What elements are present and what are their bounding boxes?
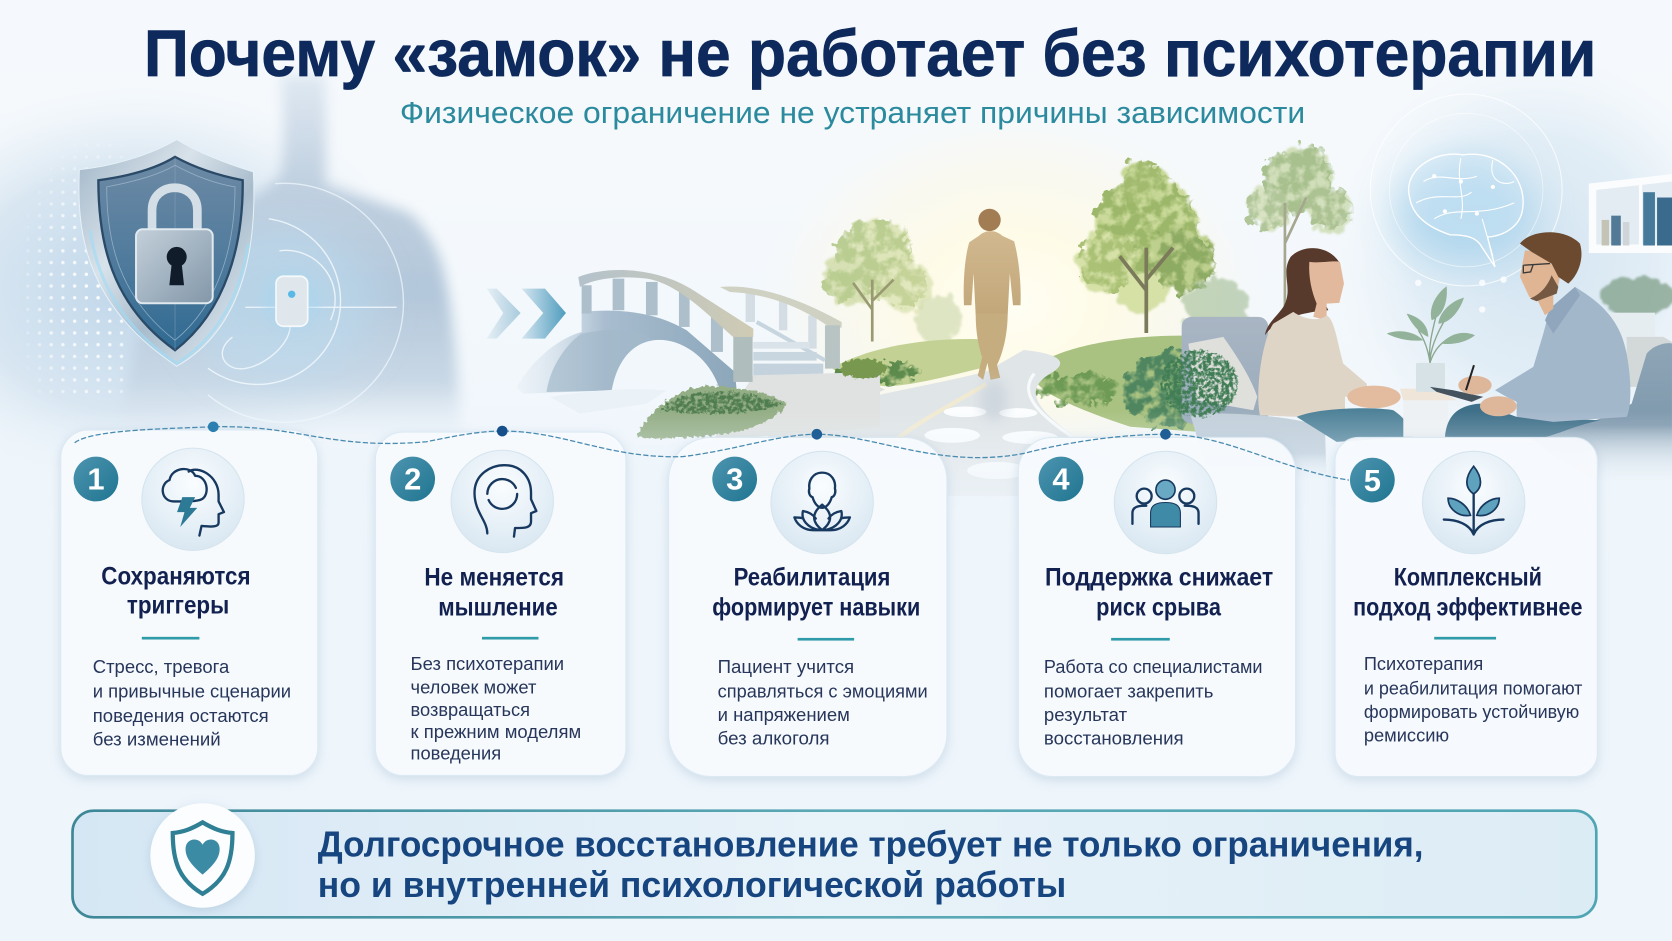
text: результат [1044,705,1127,725]
heading: Комплексный [1394,565,1542,592]
icon: sprout [1422,451,1525,554]
human torso [120,75,461,437]
text [93,657,291,750]
text: к прежним моделям [411,722,581,742]
banner text: Долгосрочное восстановление требует не только ограничения, [318,824,1424,865]
icon: group of people [1114,451,1217,554]
badge 1 [74,457,118,501]
grass [832,339,986,386]
card 3 [669,437,947,777]
card 2 [375,432,626,775]
implant device [263,272,320,329]
banner [73,803,1596,917]
text: без изменений [93,730,221,750]
trees [823,145,1352,344]
text: восстановления [1044,729,1184,749]
illustration: implant and shield [0,72,463,436]
illustration: therapy session [1162,54,1672,480]
text: и реабилитация помогают [1364,678,1582,698]
badge 1: 1 [87,462,105,497]
arch [517,311,737,394]
text: поведения [411,743,501,763]
heading: Сохраняются [101,564,251,591]
illustration: path to recovery [517,107,1352,501]
icon: person with lotus [771,451,873,554]
padlock [136,188,213,303]
armchair [1532,337,1672,480]
bush at bridge foot [637,359,887,438]
heading [1353,565,1582,622]
icon: head with cycle [451,450,553,553]
bookshelf [1589,174,1672,253]
text [411,654,581,763]
badge 5: 5 [1364,463,1381,498]
heading: формирует навыки [712,595,920,622]
signal arcs [208,183,403,422]
security shield [79,140,254,366]
timeline [75,421,1349,480]
heading: Поддержка снижает [1045,565,1273,592]
woman [1258,248,1413,442]
text: без алкоголя [718,729,830,749]
text: и привычные сценарии [93,682,291,702]
card 1 [61,430,318,775]
text [718,657,928,749]
walking man [964,209,1021,421]
sofa [1162,317,1327,480]
text: ремиссию [1364,725,1449,745]
rear rail [746,294,817,349]
heading [424,565,564,622]
heading [1045,565,1273,622]
stepping stones [925,407,1058,479]
badge 2 [390,457,435,501]
text: человек может [411,677,536,697]
subtitle: Физическое ограничение не устраняет причины зависимости [400,95,1305,130]
brain hologram [1370,94,1562,313]
steps [753,342,823,376]
heading: риск срыва [1096,595,1221,622]
text: возвращаться [411,700,530,720]
badge 3 [712,457,757,501]
bridge [517,270,880,440]
text: поведения остаются [93,706,269,726]
heading [101,564,251,619]
text: и напряжением [718,705,850,725]
bottom fade [0,411,1672,507]
arrow: chevrons [487,289,566,339]
banner text [318,824,1424,905]
water [550,389,667,414]
heading: триггеры [127,592,229,619]
table with plant [1387,286,1475,437]
title: Почему «замок» не работает без психотерапии [144,17,1596,91]
icon: storm in head [142,448,244,550]
text: Без психотерапии [411,654,564,674]
sun glow [757,107,1269,501]
badge 4 [1039,457,1083,501]
therapist [1430,232,1630,439]
badge 3: 3 [726,462,743,497]
text [1044,657,1263,749]
heading [712,565,920,622]
badge 4: 4 [1052,462,1070,497]
text: справляться с эмоциями [718,682,928,702]
posts [582,279,723,352]
banner text: но и внутренней психологической работы [318,864,1066,905]
room plant [1601,275,1672,343]
text: помогает закрепить [1044,682,1213,702]
text: Психотерапия [1364,654,1483,674]
heading: мышление [438,595,558,622]
heading: подход эффективнее [1353,595,1582,622]
text: Пациент учится [718,657,854,677]
text: формировать устойчивую [1364,702,1579,722]
badge 5 [1350,458,1395,502]
badge 2: 2 [404,462,421,497]
text [1364,654,1582,745]
icon: shield with heart [150,803,255,908]
card 4 [1018,437,1296,777]
card 5 [1335,437,1597,777]
heading: Реабилитация [734,565,890,592]
text: Стресс, тревога [93,657,230,677]
heading: Не меняется [424,565,564,592]
footpath [704,350,1130,496]
text: Работа со специалистами [1044,657,1263,677]
